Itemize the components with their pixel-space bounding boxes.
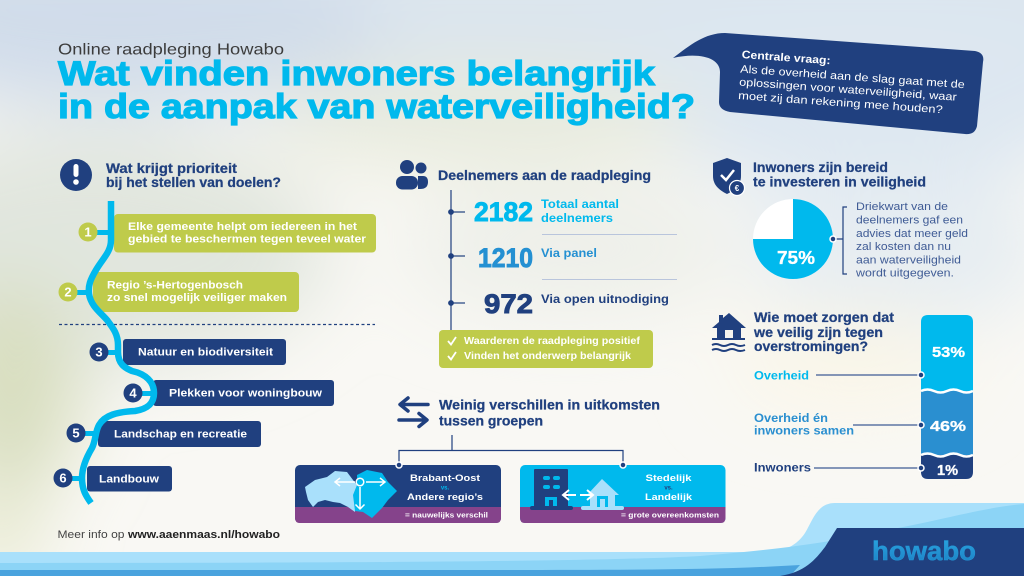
stacked bar: 53% — [932, 344, 965, 361]
priority 4: Plekken voor woningbouw — [169, 388, 322, 400]
logo howabo: howabo — [872, 536, 976, 566]
map: regions — [305, 470, 397, 518]
label: samen: Overheid én — [754, 413, 828, 425]
stat: 2182 — [474, 197, 619, 227]
panel: prioriteit doelen — [54, 159, 376, 503]
timeline — [449, 190, 465, 330]
label: samen: inwoners samen — [754, 426, 854, 438]
heading: wie — [753, 310, 895, 354]
subtitle: Online raadpleging Howabo — [58, 42, 284, 58]
priority 3: 3 — [95, 344, 103, 360]
text: driekwart: wordt uitgegeven. — [855, 268, 954, 280]
card: Stedelijk: Stedelijk — [646, 473, 692, 484]
text: driekwart: Driekwart van de — [856, 201, 948, 213]
priority 2: Regio ’s-Hertogenbosch — [107, 280, 243, 292]
stat: 2182: 2182 — [474, 197, 533, 227]
card: Brabant: = nauwelijks verschil — [405, 510, 488, 520]
priority 3 — [90, 339, 286, 365]
heading: deelnemers: Deelnemers aan de raadpleging — [438, 168, 651, 183]
callout: centrale vraag: oplossingen voor waterveiligheid, waar — [739, 77, 957, 104]
connector — [396, 435, 626, 468]
stat: 2182: Totaal aantal — [541, 199, 619, 211]
heading: investeren: te investeren in veiligheid — [753, 174, 926, 190]
heading: wie: we veilig zijn tegen — [753, 325, 883, 340]
river connectors — [70, 230, 152, 481]
callout: centrale vraag: moet zij dan rekening mee houden? — [738, 90, 943, 116]
label: inwoners — [754, 462, 924, 474]
heading: wie: overstromingen? — [754, 339, 868, 354]
icon: arrows — [399, 398, 428, 426]
panel: investeren — [713, 158, 968, 280]
priority 6: 6 — [59, 470, 67, 486]
stat: 972: 972 — [484, 289, 533, 319]
stat: 1210: 1210 — [478, 243, 533, 273]
label: overheid: Overheid — [754, 370, 809, 382]
callout: centrale vraag: Als de overheid aan de slag gaat met de — [740, 64, 965, 91]
priority 2: zo snel mogelijk veiliger maken — [107, 292, 287, 304]
card: Brabant: Brabant-Oost — [410, 473, 481, 484]
more info link — [58, 529, 280, 541]
text: driekwart: zal kosten dan nu — [856, 241, 951, 253]
card: Brabant: Andere regio’s — [407, 492, 483, 503]
priority 2: 2 — [64, 284, 72, 300]
pie chart: 75% — [777, 248, 815, 268]
priority 1: 1 — [84, 224, 92, 240]
label: samen — [754, 413, 924, 438]
panel: deelnemers — [396, 160, 677, 368]
card: Stedelijk: vs. — [664, 486, 673, 492]
stat: 1210: Via panel — [541, 248, 597, 260]
stat: 2182: deelnemers — [541, 213, 613, 225]
navy logo panel — [780, 528, 1024, 576]
label: inwoners: Inwoners — [754, 462, 811, 474]
priority 5: Landschap en recreatie — [114, 428, 247, 440]
label: overheid — [754, 370, 924, 382]
title — [58, 55, 695, 126]
priority 1 — [78, 214, 376, 252]
icon: shield — [713, 158, 744, 196]
green checklist: Waarderen de raadpleging positief — [464, 335, 641, 347]
stat: 972 — [484, 289, 669, 319]
heading: wie: Wie moet zorgen dat — [754, 310, 895, 325]
card: Stedelijk: Landelijk — [645, 492, 693, 503]
card: Stedelijk: = grote overeenkomsten — [621, 510, 719, 520]
icon: people — [396, 160, 428, 190]
heading: investeren: Inwoners zijn bereid — [753, 160, 888, 175]
icon: house — [581, 479, 624, 510]
icon: flooded house — [712, 313, 746, 351]
priority 1: Elke gemeente helpt om iedereen in het — [128, 221, 357, 233]
heading: investeren — [753, 160, 926, 190]
priority 5 — [66, 421, 261, 447]
green checklist — [439, 330, 653, 368]
priority 2 — [58, 272, 299, 312]
callout: centrale vraag — [673, 33, 983, 134]
card: Brabant — [295, 465, 501, 523]
footer waves — [0, 503, 1024, 576]
heading: prioriteit: bij het stellen van doelen? — [106, 175, 281, 190]
icon: exclamation — [60, 159, 92, 191]
text: driekwart — [855, 201, 968, 280]
title: in de aanpak van waterveiligheid? — [58, 88, 695, 126]
pie chart — [753, 199, 833, 279]
callout: centrale vraag: Centrale vraag: — [741, 49, 831, 67]
stacked bar: 46% — [930, 418, 966, 435]
priority 6: Landbouw — [99, 474, 159, 486]
icon: building — [530, 469, 573, 510]
heading: prioriteit: Wat krijgt prioriteit — [106, 161, 238, 176]
priority 6 — [54, 466, 172, 492]
priority 4: 4 — [129, 386, 137, 400]
stat: 972: Via open uitnodiging — [541, 294, 669, 306]
priority 3: Natuur en biodiversiteit — [138, 346, 273, 358]
text: driekwart: deelnemers gaf een — [856, 214, 963, 226]
card: Brabant: vs. — [441, 486, 450, 492]
bracket — [830, 207, 847, 274]
heading: verschillen: Weinig verschillen in uitkomsten — [439, 398, 660, 412]
priority 4 — [124, 380, 334, 406]
panel: verschillen — [295, 398, 726, 523]
priority 1: gebied te beschermen tegen teveel water — [128, 234, 367, 246]
heading: verschillen — [439, 398, 660, 428]
text: driekwart: advies dat meer geld — [856, 228, 968, 240]
card: Stedelijk — [520, 465, 726, 523]
arrows: both ways — [563, 490, 593, 500]
title: Wat vinden inwoners belangrijk — [58, 55, 655, 93]
icon: shield: € — [735, 184, 740, 193]
more info link: www.aaenmaas.nl/howabo — [127, 529, 280, 541]
panel: wie moet zorgen — [712, 310, 973, 479]
stacked bar: 1% — [937, 462, 958, 479]
heading: verschillen: tussen groepen — [439, 414, 543, 428]
priority 5: 5 — [72, 426, 80, 440]
river line — [82, 201, 154, 503]
green checklist: Vinden het onderwerp belangrijk — [464, 350, 631, 362]
stacked bar — [921, 315, 973, 479]
heading: prioriteit — [106, 161, 281, 190]
text: driekwart: aan waterveiligheid — [856, 254, 961, 266]
stat: 1210 — [478, 243, 597, 273]
more info link: Meer info op — [58, 529, 124, 541]
